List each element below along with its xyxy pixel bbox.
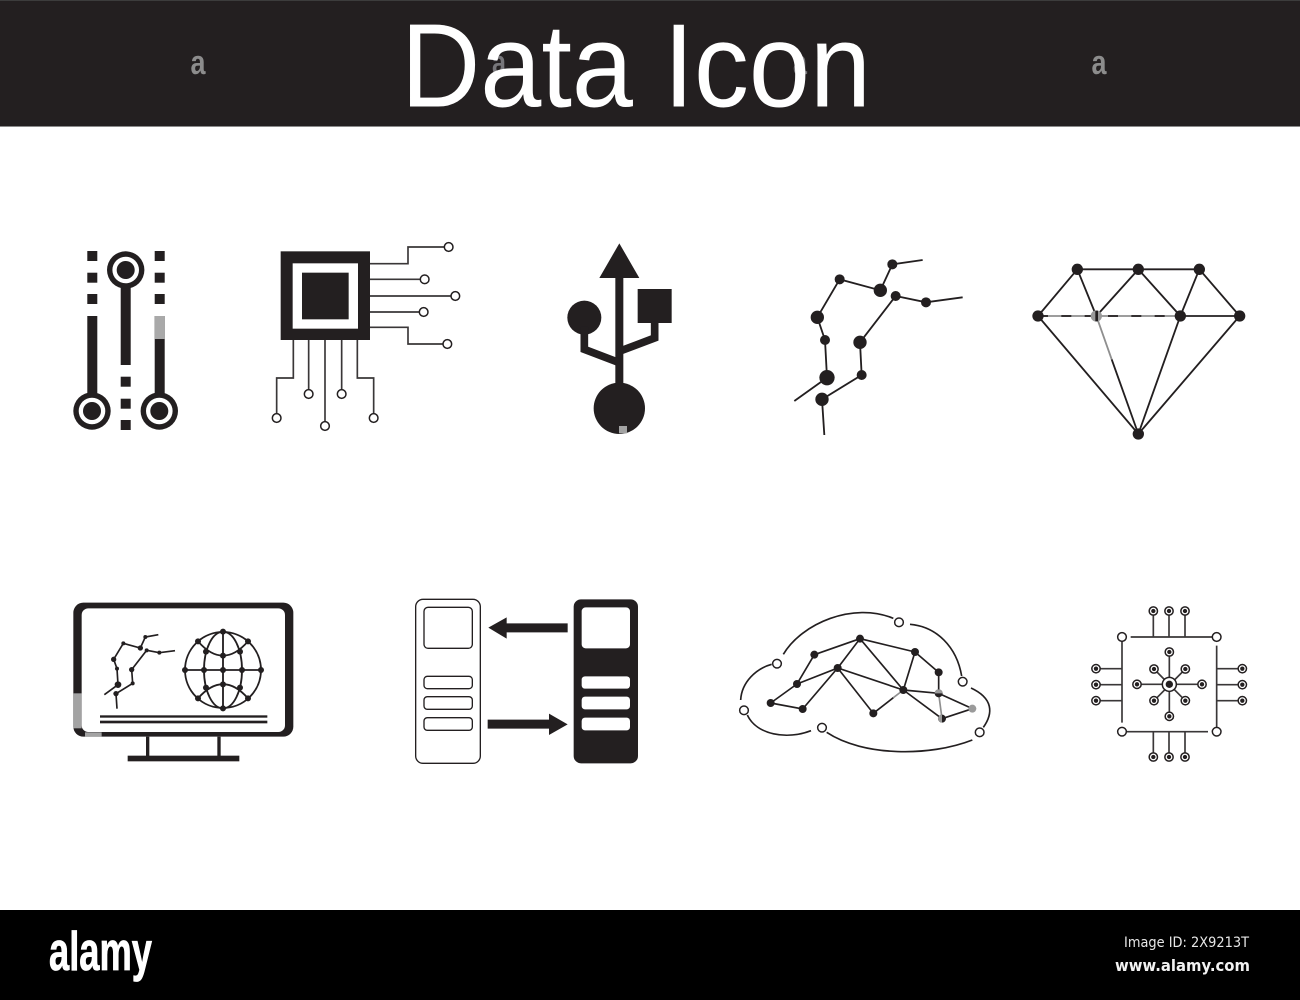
- icon: circuit traces: [73, 251, 178, 430]
- icon: network diamond: [1032, 264, 1245, 440]
- header banner: [0, 0, 1300, 132]
- icon: servers exchanging data: [416, 599, 638, 763]
- icon: microchip with traces: [272, 243, 460, 430]
- icon: cloud network: [740, 613, 990, 752]
- header banner: a: [492, 44, 507, 82]
- icon: monitor with network and globe: [73, 603, 293, 761]
- image id: Image ID: 2X9213T: [1124, 935, 1249, 951]
- website: www.alamy.com: [1115, 956, 1250, 975]
- header banner: a: [1092, 44, 1107, 82]
- network globe: [182, 629, 264, 711]
- alamy logo: alamy: [49, 920, 152, 982]
- header banner: a: [793, 44, 808, 82]
- icon: USB symbol: [567, 243, 672, 434]
- icon: processor circuit: [1092, 607, 1246, 761]
- monitor frame: [73, 603, 293, 761]
- footer bar: [0, 910, 1300, 1000]
- arrow: right: [488, 714, 568, 735]
- filled server: [574, 599, 638, 763]
- mini network: [104, 635, 175, 709]
- title: Data Icon: [401, 0, 871, 132]
- outlined server: [416, 599, 480, 763]
- icon: network constellation: [794, 259, 963, 435]
- arrow: left: [488, 617, 568, 639]
- header banner: a: [190, 44, 206, 82]
